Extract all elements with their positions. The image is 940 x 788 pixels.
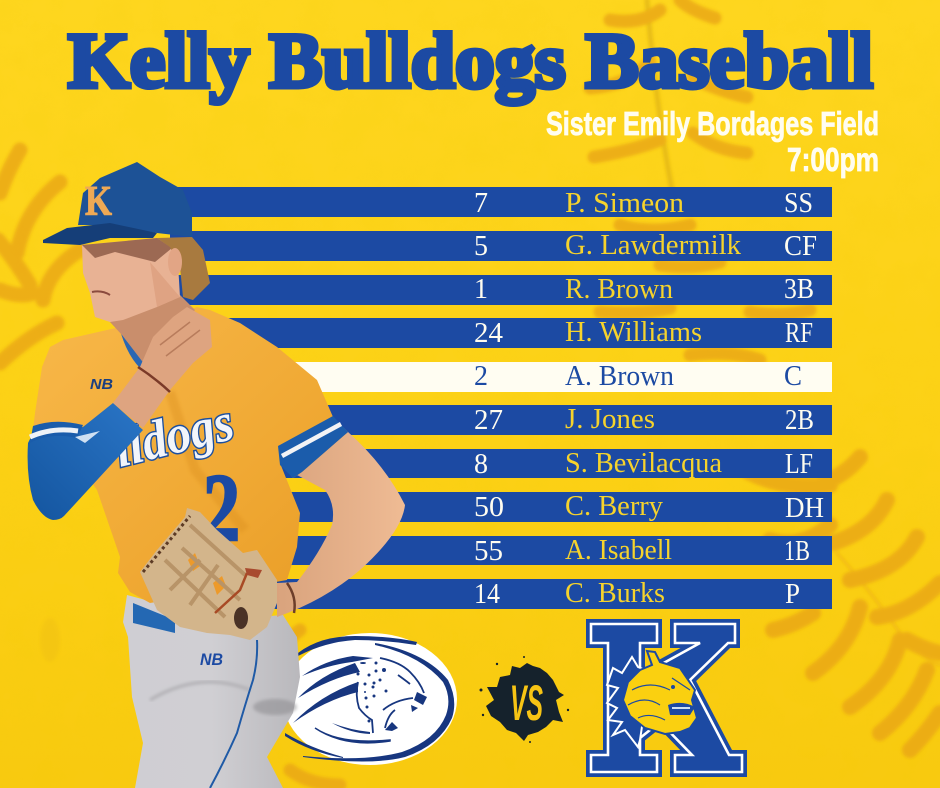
row 4: H. Williams (565, 317, 702, 348)
bulldog head (623, 651, 697, 734)
row 5 highlighted: A. Brown (565, 361, 674, 392)
VS splat (480, 656, 569, 743)
neck (110, 295, 195, 365)
row 3: R. Brown (565, 274, 673, 305)
row 8: DH (785, 493, 824, 524)
row 3: 1 (474, 274, 488, 305)
row 1 (170, 187, 832, 219)
jersey: 2 (203, 454, 240, 561)
jersey: lldogs (108, 391, 239, 479)
K white inline (591, 624, 742, 772)
row 7 (170, 448, 832, 480)
row 1: SS (784, 188, 813, 219)
cap: K (85, 179, 112, 225)
row 8: 50 (474, 492, 504, 523)
pants (123, 595, 300, 788)
ear (168, 248, 182, 276)
row 6: 2B (785, 405, 814, 436)
row 7: LF (785, 449, 813, 480)
row 1: 7 (474, 188, 488, 219)
row 9: 55 (474, 536, 503, 567)
fielding glove (140, 508, 277, 640)
row 7: 8 (474, 449, 488, 480)
row 6 (170, 404, 832, 436)
starburst (607, 657, 650, 747)
cap (43, 162, 192, 245)
row 2: G. Lawdermilk (565, 230, 741, 261)
Kelly K bulldog logo (591, 624, 742, 772)
row 10: P (785, 579, 800, 610)
hair (157, 237, 210, 300)
head and face (82, 238, 180, 322)
row 7: S. Bevilacqua (565, 448, 723, 479)
hand at collar (113, 307, 212, 428)
row 9: 1B (784, 536, 810, 567)
opponent logo: jaguars (283, 633, 457, 765)
jersey (33, 307, 348, 603)
row 4: 24 (474, 318, 503, 349)
row 10 (170, 578, 832, 610)
row 2 (170, 230, 832, 262)
blue arm sleeve (28, 403, 143, 520)
row 4 (170, 317, 832, 349)
row 8: C. Berry (565, 491, 663, 522)
venue and time (546, 105, 879, 178)
right arm (277, 432, 405, 617)
row 3 (170, 274, 832, 305)
VS splat: VS (510, 675, 543, 731)
row 9: A. Isabell (565, 535, 672, 566)
player photo illustration (28, 162, 405, 788)
row 6: 27 (474, 405, 503, 436)
row 10: 14 (474, 579, 500, 610)
lineup table (170, 187, 832, 610)
row 5 highlighted: 2 (474, 361, 488, 392)
row 2: 5 (474, 231, 488, 262)
title: Kelly Bulldogs Baseball (68, 17, 873, 104)
row 5 highlighted: C (784, 361, 802, 392)
row 2: CF (784, 231, 817, 262)
row 1: P. Simeon (565, 188, 684, 219)
row 6: J. Jones (565, 404, 655, 435)
row 10: C. Burks (565, 578, 665, 609)
game time: 7:00pm (787, 141, 879, 178)
row 8 (170, 491, 832, 524)
row 4: RF (785, 318, 813, 349)
row 9 (170, 535, 832, 567)
jersey: NB (90, 376, 113, 393)
row 5 highlighted (170, 361, 832, 392)
K letter (591, 624, 742, 772)
row 3: 3B (784, 274, 814, 305)
pants: NB (200, 650, 223, 669)
